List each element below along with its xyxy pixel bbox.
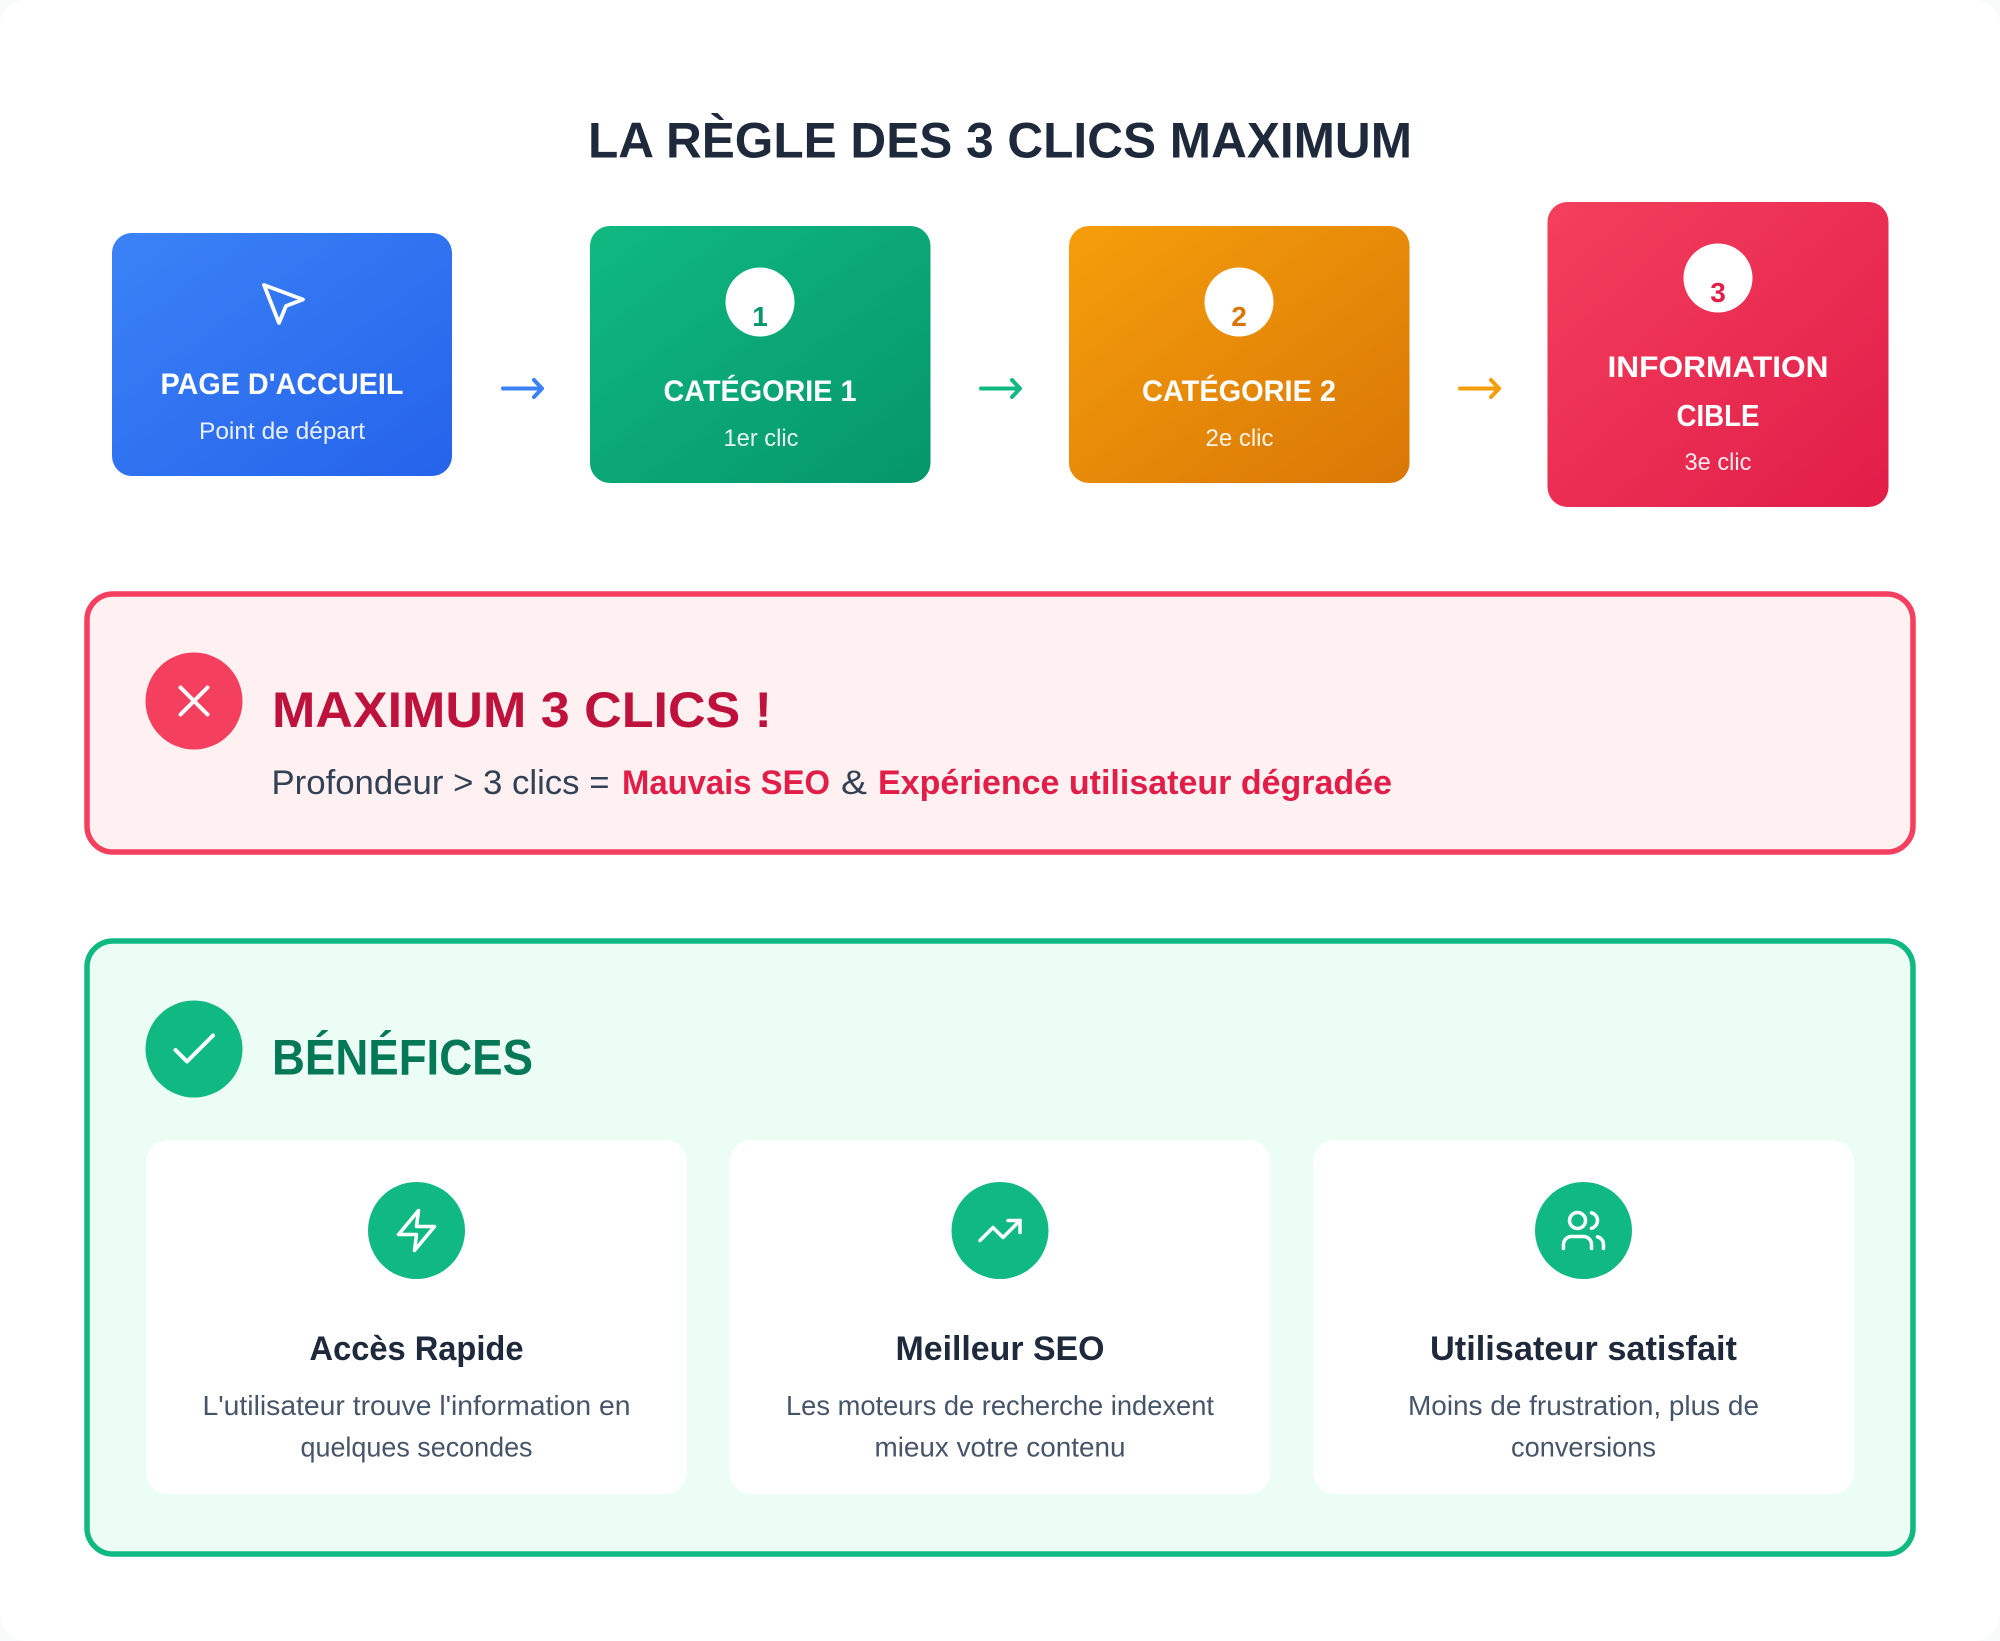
benefit card: utilisateur satisfait <box>1313 1140 1854 1494</box>
warning text: Expérience utilisateur dégradée <box>878 764 1392 802</box>
flow step: information cible <box>1548 202 1888 507</box>
benefit card: accès rapide <box>146 1140 687 1494</box>
step title <box>1608 351 1828 433</box>
step title: CIBLE <box>1676 398 1760 433</box>
icon: trending up <box>952 1182 1048 1279</box>
card description: quelques secondes <box>300 1432 532 1462</box>
step subtitle: Point de départ <box>199 418 365 445</box>
warning text: Profondeur > 3 clics = <box>272 764 610 802</box>
arrow: green <box>981 380 1020 397</box>
benefits heading: BÉNÉFICES <box>272 1030 533 1086</box>
card description <box>786 1390 1214 1462</box>
number badge 2 <box>1204 268 1274 336</box>
card title: Utilisateur satisfait <box>1430 1330 1737 1368</box>
card description <box>202 1390 630 1462</box>
step title: CATÉGORIE 2 <box>1142 374 1336 408</box>
step title: PAGE D'ACCUEIL <box>160 368 404 401</box>
title: LA RÈGLE DES 3 CLICS MAXIMUM <box>588 112 1412 168</box>
card description <box>1408 1390 1759 1462</box>
warning text <box>272 764 1392 802</box>
card description: conversions <box>1511 1432 1656 1462</box>
card description: L'utilisateur trouve l'information en <box>202 1390 630 1421</box>
icon: users <box>1535 1182 1632 1279</box>
icon: cross in circle <box>146 652 242 750</box>
warning text: & <box>841 764 867 802</box>
number badge 2: 2 <box>1231 301 1247 332</box>
card title: Meilleur SEO <box>896 1330 1104 1368</box>
icon: lightning bolt <box>368 1182 465 1279</box>
number badge 1 <box>726 268 794 336</box>
step title: CATÉGORIE 1 <box>664 374 856 408</box>
arrow: blue <box>503 380 542 397</box>
benefit card: meilleur SEO <box>730 1140 1270 1494</box>
flow step: catégorie 1 <box>590 226 930 483</box>
step subtitle: 3e clic <box>1684 449 1752 476</box>
panel: warning <box>87 594 1913 852</box>
card description: mieux votre contenu <box>874 1432 1126 1462</box>
card description: Moins de frustration, plus de <box>1408 1390 1759 1421</box>
icon: check in circle <box>146 1000 242 1098</box>
card description: Les moteurs de recherche indexent <box>786 1390 1214 1421</box>
warning heading: MAXIMUM 3 CLICS ! <box>272 682 772 738</box>
number badge 3 <box>1684 244 1752 312</box>
number badge 3: 3 <box>1710 277 1726 308</box>
panel: benefits <box>87 941 1913 1554</box>
number badge 1: 1 <box>752 301 768 332</box>
arrow: orange <box>1460 380 1499 397</box>
icon: mouse pointer <box>264 285 303 323</box>
card title: Accès Rapide <box>310 1330 524 1368</box>
step subtitle: 2e clic <box>1206 425 1274 452</box>
step subtitle: 1er clic <box>724 425 798 452</box>
flow step: page d'accueil <box>112 233 452 476</box>
warning text: Mauvais SEO <box>622 764 830 802</box>
step title: INFORMATION <box>1608 351 1828 384</box>
flow step: catégorie 2 <box>1069 226 1410 483</box>
